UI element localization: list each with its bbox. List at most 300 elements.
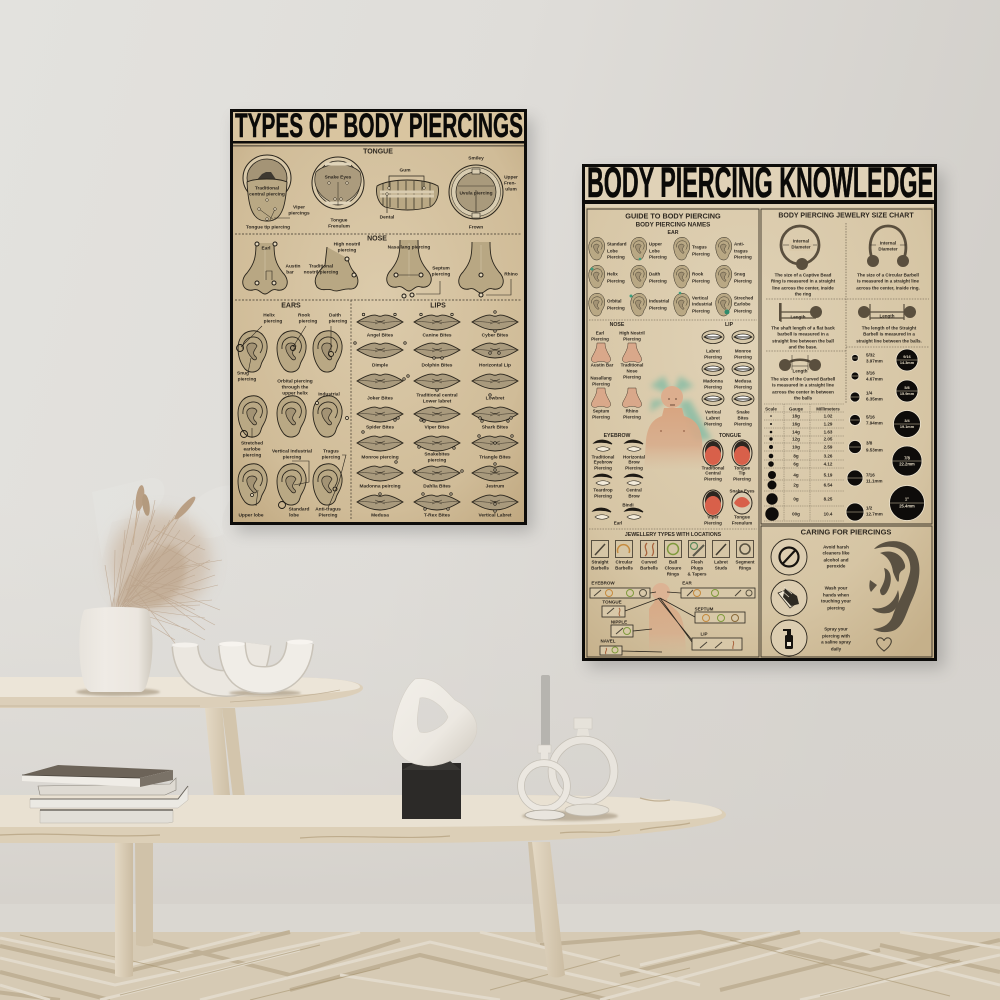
ear labels: piercing [283,454,301,460]
ear piercing names grid: Upper [649,242,662,246]
ear labels: Piercing [319,512,338,518]
ear piercing names grid: Standard [607,242,627,246]
circular barbell diagram [856,226,920,290]
lower table top [0,795,726,843]
straight barbell diagram: Barbell is measured in a [863,332,915,336]
diagram: tongue 2 snake eyes [312,157,364,230]
ear labels: Tragus [323,448,339,454]
diagram: teeth and gum: Gum [400,168,410,174]
lip labels [359,332,512,518]
diagram: nasallang and septum [387,240,450,298]
caring tip 3: piercing with [822,634,850,638]
lip section: LIP [725,322,734,328]
poster: Types of Body Piercings [230,107,527,525]
nose section: Austin Bar [591,362,614,368]
tongue section: Snake Eyes [729,488,755,494]
straight barbell diagram: straight line between the balls. [856,338,922,344]
lip section: Piercing [734,384,752,390]
jewellery type boxes: & Tapers [688,572,707,576]
lip section: Piercing [704,384,722,390]
jewellery type boxes: Rings [667,572,680,576]
panel: tongue [243,148,518,230]
ear labels: piercing [299,318,317,324]
eyebrow section: Bindi [622,502,634,508]
ear piercing names grid: tragus [734,248,748,254]
lip labels: Spider Bites [366,424,394,430]
ear labels: Vertical industrial [272,448,312,454]
lip labels: Triangle Bites [479,454,511,460]
gauge table: 5.19 [824,472,833,478]
ear labels: piercing [238,376,256,382]
gauge table: 18g [792,414,800,418]
ear piercing names grid: Piercing [734,278,752,284]
plug sizes: 3.97mm [866,358,883,364]
nose section: High Nostril [619,330,645,336]
eyebrow section: Eyebrow [594,460,613,464]
ear labels: piercing [243,452,261,458]
jewellery type boxes: Ball [669,560,677,564]
eyebrow section: Teardrop [593,488,613,492]
lip section: Piercing [734,354,752,360]
nose section: Piercing [591,336,609,342]
jewellery location chart: NAVEL [601,638,616,644]
gauge table: 00g [792,512,800,516]
curved barbell diagram [771,355,835,400]
plug sizes: 25.4mm [899,504,915,508]
captive bead ring diagram: Diameter [791,244,811,250]
plug sizes: 3/16 [866,370,875,376]
diagram: nasallang and septum: Nasallang piercing [388,244,430,250]
panel: jewelry size chart [764,212,924,521]
captive bead ring diagram: The size of a Captive Bead [775,272,832,278]
diagram: nostril piercings [304,242,360,291]
ear piercing names grid: Orbital [607,298,622,304]
diagram: nostril piercings: High nostril [334,242,360,248]
lip section: Labret [706,348,720,354]
gauge table: 10g [792,444,800,450]
plug sizes: 12.7mm [866,512,883,516]
diagram: nasallang and septum: Septum [432,266,450,272]
diagram: earl and austin bar: bar [286,270,294,276]
lip labels: Shark Bites [482,424,509,430]
circular barbell diagram: is measured in a straight line [857,278,920,284]
tongue section: Piercing [704,476,722,482]
tongue section: Piercing [733,476,751,482]
eyebrow section: Piercing [594,494,612,498]
diagram: nostril piercings: Traditional [309,264,333,270]
ear labels: earlobe [243,446,261,452]
plug sizes: 22.2mm [899,462,915,466]
panel: nose [243,236,518,298]
nose section: NOSE [610,322,625,328]
eyebrow section: Traditional [592,454,614,460]
curved barbell diagram: the balls [794,396,813,400]
ear labels: through the [282,384,309,390]
arch candle holder back [172,642,258,683]
panel frames [587,209,932,657]
diagram: tongue 2 snake eyes: Frenulum [328,224,350,230]
nose section: Nose [626,368,638,374]
lip labels: Canine Bites [422,332,452,338]
ear labels: Helix [263,312,275,318]
diagram: open mouth: Smiley [468,156,484,162]
pampas grass [105,485,222,650]
lips heading: LIPS [430,302,446,310]
plug sizes: 7/16 [866,472,875,478]
captive bead ring diagram: Internal [793,238,809,244]
eyebrow section [592,433,645,526]
caring tip 2: hands when [823,592,849,598]
diagram: earl and austin bar: Austin [286,264,301,270]
jewellery type boxes: Barbells [615,566,633,570]
lip section: Piercing [704,422,722,426]
lip labels: Dolphin Bites [422,362,453,368]
nose section: Piercing [592,414,610,420]
diagram: open mouth: ulum [505,186,517,192]
lip labels: Angel Bites [367,332,394,338]
jewellery type boxes: Barbells [640,566,658,570]
tongue section: Tip [739,470,746,476]
tongue section: Traditional [702,466,724,470]
diagram: open mouth: Upper [504,174,518,180]
gauge table: 6g [793,462,799,466]
plug sizes: 11.1mm [866,478,883,484]
diagram: rhino [459,242,518,297]
title band: TYPES OF BODY PIERCINGS [235,107,523,145]
jewellery location chart: EYEBROW [591,580,615,586]
lip labels: Traditional central [416,392,458,398]
ear labels: Industrial [318,392,340,398]
ear piercing names grid: Piercing [607,254,625,260]
lip labels: Cyber Bites [482,332,509,338]
tongue section [702,433,755,526]
jewellery type boxes: Rings [739,566,752,570]
tongue heading: TONGUE [363,148,393,156]
poster: Body Piercing Knowledge [582,159,937,661]
flat back barbell diagram: straight line between the ball [772,338,834,344]
ear piercing names grid [589,237,754,316]
plug sizes: 5/32 [866,352,875,358]
ear piercing names grid: Helix [607,272,618,276]
eyebrow section: Brow [628,494,640,498]
jewellery type boxes: Studs [715,566,728,570]
ear piercing names grid: Piercing [607,278,625,284]
tongue section: Central [705,470,721,476]
diagram: tongue 1: piercings [288,210,310,216]
ear piercing names grid: Piercing [649,254,667,260]
gauge table: 12g [792,436,800,442]
nose section: Piercing [623,336,641,342]
caring tip 3: a saline spray [821,640,851,644]
plug sizes: 3/8 [866,440,873,446]
icon: no harsh cleaners [771,539,807,575]
tongue section: Tongue [734,514,750,520]
nose heading: NOSE [367,236,387,242]
eyebrow section: Brow [628,460,640,464]
diagram: open mouth [449,156,518,230]
gauge table: 1.02 [824,414,833,418]
ears heading: EARS [281,302,301,310]
candle holders [521,675,618,821]
lip labels: Viper Bites [425,424,450,430]
guide heading: GUIDE TO BODY PIERCING [625,212,721,220]
straight barbell diagram: Length [880,314,895,318]
lip section: Piercing [734,422,752,426]
diagram: nostril piercings: piercing [338,248,356,254]
diagram: tongue 1: Tongue tip piercing [246,224,290,230]
ear labels: Snug [237,370,249,376]
jewellery location chart [590,580,755,657]
lip labels: Joker Bites [367,396,393,402]
plug sizes: 19.1mm [900,425,915,429]
lip diagrams [355,312,518,511]
small ring holder with candle [521,675,567,820]
jewellery type boxes: Circular [615,560,633,564]
diagram: earl and austin bar [243,242,301,294]
ear labels: Rook [298,312,310,318]
plug sizes: 15.9mm [900,392,915,396]
lip section: Medusa [735,378,752,384]
ear piercing names grid: Piercing [649,306,667,310]
captive bead ring diagram: Ring is measured in a straight [771,278,836,284]
plug sizes [846,349,924,521]
jewellery location chart: NIPPLE [611,620,627,624]
lip labels: Lowbret [486,396,505,402]
ear piercing names grid: Piercing [649,278,667,284]
body figure with teal highlights [644,376,712,470]
eyebrow section: EYEBROW [604,433,631,439]
ear piercing names grid: Lobe [649,248,660,254]
gauge table: 6.54 [824,482,833,488]
eyebrow section: Central [626,488,642,492]
plug sizes: 7.94mm [866,420,883,426]
ear piercing names grid: Piercing [692,252,710,256]
caring tip 2 [821,586,851,610]
caring tip 1: peroxide [827,564,846,568]
lip labels: T-Rex Bites [424,512,450,518]
ear piercing names grid: Anti- [734,242,745,246]
gauge table: 4.12 [824,462,833,466]
flat back barbell diagram: The shaft length of a flat back [771,326,835,330]
gauge table: 10.4 [824,512,833,516]
nose section: Rhino [626,408,639,414]
ear piercing names grid: Rook [692,272,704,276]
plug sizes: 7/8 [904,456,911,460]
plug sizes: 5/16 [866,414,875,420]
flat back barbell diagram [771,303,835,350]
jewellery type boxes: Straight [591,560,609,564]
diagram: tongue 2 snake eyes: Tongue [331,218,348,224]
icon: washing hands [771,580,807,616]
ear piercing names grid: Piercing [734,254,752,260]
jewellery location chart: EAR [682,580,692,586]
diagram: open mouth: Uvula piercing [459,190,493,196]
plug sizes: 4.67mm [866,376,883,382]
faint watermark shapes [92,478,240,560]
gauge table: 2.05 [824,436,833,442]
plug sizes: 3/4 [904,419,911,423]
caring tip 2: touching your [821,598,851,604]
caring tip 1 [822,544,850,568]
ear labels: Daith [329,312,341,318]
gauge table: 8.25 [824,496,833,502]
circular barbell diagram: across the center, inside ring. [856,286,920,290]
panel: lips [355,302,518,518]
lip section: Piercing [704,354,722,360]
jewellery type boxes: Segment [735,560,755,564]
ear labels: piercing [322,454,340,460]
vase [76,607,160,696]
caring tip 1: alcohol and [823,558,849,562]
lip section: Bites [737,416,749,420]
panel: caring for piercings [771,528,919,656]
ear labels: Orbital piercing [277,378,313,384]
ear piercing names grid: Piercing [692,308,710,314]
lip labels: Snakebites [424,452,450,458]
eyebrow section: Piercing [625,466,643,470]
circular barbell diagram: The size of a Circular Barbell [857,272,919,278]
ear labels: Standard [289,506,309,512]
gauge table: Millimeters [816,406,840,412]
nose section: Nasallang [590,376,612,380]
caring tip 1: Avoid harsh [823,544,849,550]
caring tip 2: piercing [827,606,845,610]
size chart heading: BODY PIERCING JEWELRY SIZE CHART [778,212,914,220]
arch candle holder front [219,640,313,696]
subheading: BODY PIERCING NAMES [636,222,710,228]
circular barbell diagram: Diameter [878,246,898,252]
caring heading: CARING FOR PIERCINGS [801,528,891,536]
gauge table: 1.29 [824,422,833,426]
diagram: nostril piercings: nostril piercing [304,270,338,276]
flat back barbell diagram: and the base. [789,344,817,350]
ear piercing names grid: Streched [734,296,754,300]
tongue section: Tongue [734,466,750,470]
ear piercing names grid: Vertical [692,296,708,300]
diagram: nasallang and septum: piercing [432,272,450,278]
captive bead ring diagram: line across the center, inside [772,286,834,290]
floor: herringbone wood [0,932,1000,1000]
jewellery type boxes: Curved [641,560,657,564]
gauge table: 16g [792,422,800,426]
nose section [590,322,645,420]
ear piercing names grid: Snug [734,272,745,276]
stack of books [22,765,188,823]
eyebrow section: Piercing [594,466,612,470]
diagram: teeth and gum: Dental [380,214,394,220]
jewellery type boxes [591,540,755,576]
panel: guide to body piercing [589,212,755,657]
plug sizes: 1" [905,496,909,502]
lip labels: Dahlia Bites [423,484,451,490]
lip labels: Horizontal Lip [479,362,511,368]
lip labels: Vertical Labret [478,512,512,518]
gauge table: 0g [793,496,799,502]
lip labels: Monroe piercing [361,454,399,460]
plug sizes: 1/4 [866,390,873,396]
curved barbell diagram: The size of the Curved Barbell [771,376,835,382]
captive bead ring diagram: the ring [795,292,812,296]
jewellery type boxes: Barbells [591,566,609,570]
ear labels: piercing [264,318,282,324]
jewellery type boxes: Plugs [691,566,704,570]
dotted dividers [589,223,929,529]
tongue section: Piercing [704,520,722,526]
section dividers [235,234,522,520]
gauge table [764,404,844,521]
plug sizes: 5/8 [904,386,910,390]
diagram: teeth and gum [376,168,439,220]
lip section [702,322,754,426]
flat back barbell diagram: Length [790,314,806,320]
caring tip 3 [821,626,851,652]
poster shadows [236,118,944,668]
circular barbell diagram: Internal [880,240,896,246]
ear subheading: EAR [668,230,679,236]
diagram: open mouth: Frown [469,224,483,230]
gauge table: 8g [793,454,799,458]
jewellery location chart: SEPTUM [695,606,714,612]
ear labels: upper helix [282,390,308,396]
jewellery types heading: JEWELLERY TYPES WITH LOCATIONS [625,532,722,538]
caring tip 3: Spray your [824,626,848,632]
ear piercing names grid: Piercing [607,306,625,310]
upper table top [0,677,363,708]
curved barbell diagram: Length [792,368,808,374]
jewellery type boxes: Closure [665,566,682,570]
gauge table: 14g [792,430,800,434]
curved barbell diagram: across the center in between [772,390,834,394]
plug sizes: 6.35mm [866,396,883,402]
ear labels: lobe [289,512,299,518]
ear diagrams [236,326,348,508]
diagram: tongue 1: Viper [293,204,305,210]
curved barbell diagram: is measured in a straight line [772,382,835,388]
ear piercing names grid: Piercing [692,278,710,284]
diagram: tongue 1 [243,155,310,230]
lip section: Madonna [703,378,723,384]
caring tip 1: cleaners like [822,550,850,556]
ear piercing names grid: Industrial [692,302,712,306]
gauge table: Gauge [789,406,803,412]
icon: saline spray [771,620,807,656]
large ring holder [552,718,614,816]
ear labels: Upper lobe [238,512,264,518]
diagram: open mouth: Fren- [504,180,516,186]
nose section: Piercing [623,414,641,420]
lip labels: Madonna peircing [359,484,401,490]
ear piercing names grid: Piercing [734,308,752,314]
jewellery type boxes: Flesh [691,560,703,564]
upper table legs [205,708,246,830]
lip section: Snake [736,410,750,414]
large ear illustration [869,541,919,632]
plug sizes: 14.3mm [900,361,915,365]
ear piercing names grid: Lobe [607,248,618,254]
ear labels [237,312,347,518]
tongue section: Frenulum [732,520,752,526]
tongue section: TONGUE [719,433,742,439]
ear labels: Stretched [241,440,263,446]
lip labels: Medusa [371,512,389,518]
lip section: Labret [706,416,720,420]
eyebrow section: Horizontal [623,454,645,460]
gauge table: 2g [793,482,799,488]
nose section: Piercing [623,374,641,380]
ear piercing names grid: Earlobe [734,302,751,306]
flat back barbell diagram: barbell is measured in a [777,332,829,336]
lip section: Monroe [735,348,752,354]
